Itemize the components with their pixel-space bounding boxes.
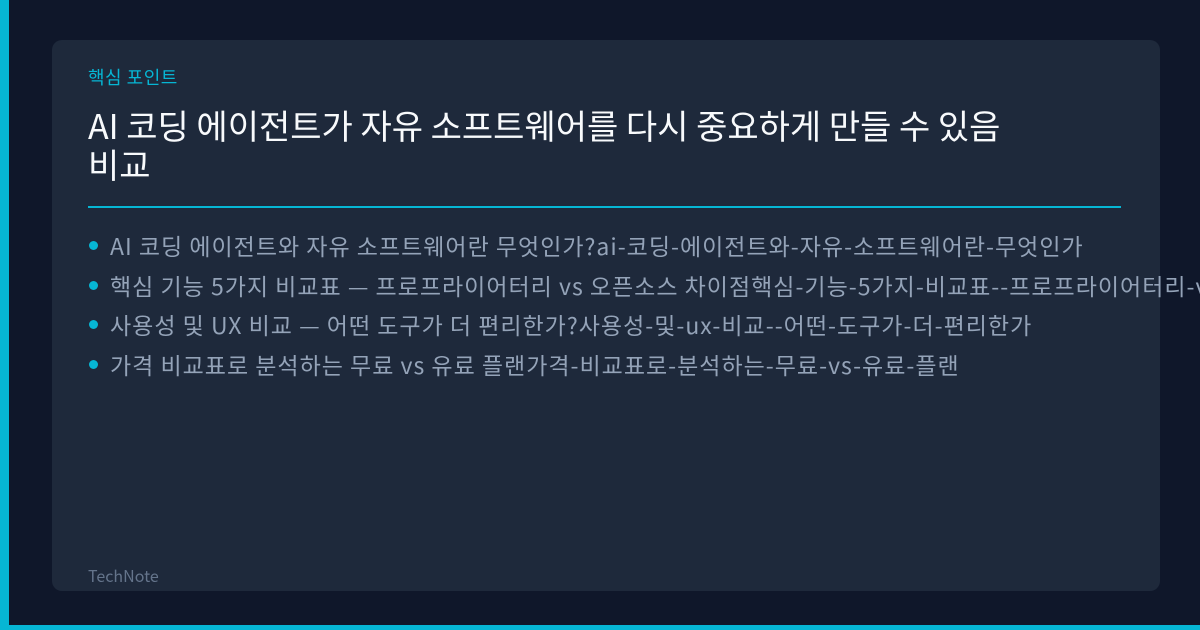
left accent bar	[0, 0, 9, 630]
bullet list	[89, 229, 1200, 380]
kicker label: 핵심 포인트	[88, 64, 178, 90]
footer brand: TechNote	[88, 563, 159, 587]
bullet 4: 가격 비교표로 분석하는 무료 vs 유료 플랜가격-비교표로-분석하는-무료-vs-유료-플랜	[110, 348, 960, 380]
title: 비교	[88, 139, 151, 188]
title: AI 코딩 에이전트가 자유 소프트웨어를 다시 중요하게 만들 수 있음	[88, 100, 1000, 149]
bullet 1: AI 코딩 에이전트와 자유 소프트웨어란 무엇인가?ai-코딩-에이전트와-자유-소프트웨어란-무엇인가	[110, 229, 1084, 262]
bottom accent bar	[0, 625, 1200, 630]
title	[88, 100, 1000, 188]
bullet 3: 사용성 및 UX 비교 — 어떤 도구가 더 편리한가?사용성-및-ux-비교--어떤-도구가-더-편리한가	[110, 308, 1032, 341]
